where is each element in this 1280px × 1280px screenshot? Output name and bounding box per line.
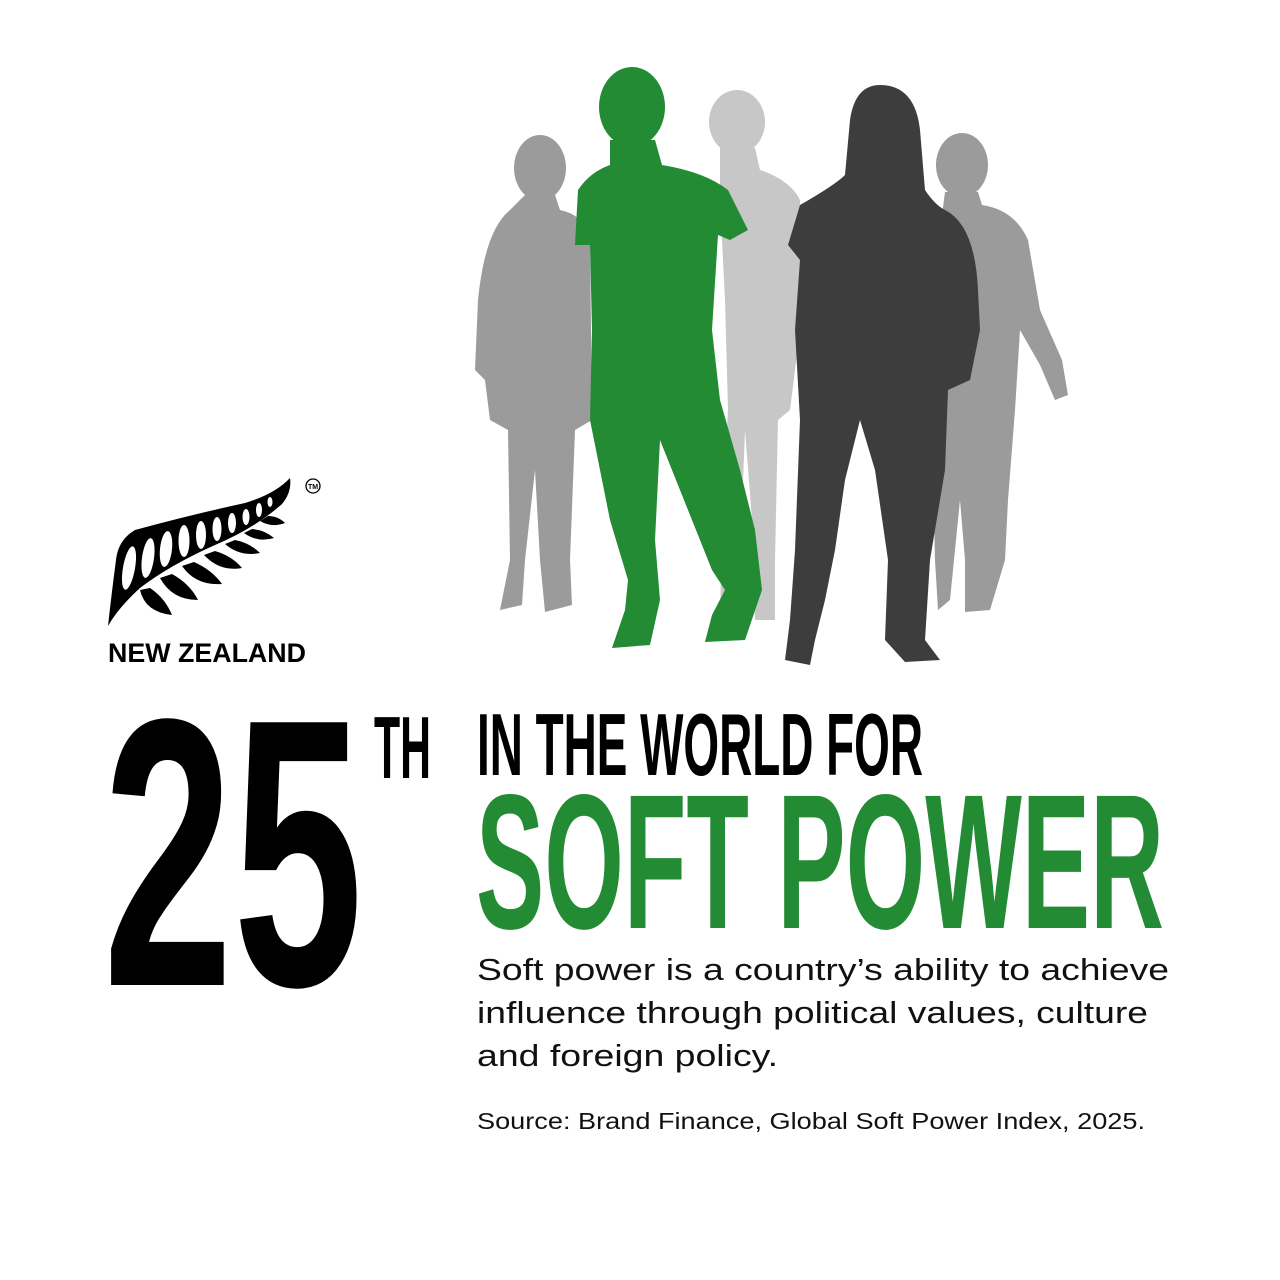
silhouette: dark gray person	[785, 85, 980, 665]
description text	[477, 952, 1169, 1073]
description text: influence through political values, culture	[477, 995, 1148, 1030]
silhouette: green person	[575, 67, 762, 648]
icon: trademark: TM	[308, 484, 318, 491]
description text: Soft power is a country’s ability to achieve	[477, 952, 1169, 987]
silhouettes group	[475, 67, 1068, 665]
logo text: NEW ZEALAND	[108, 638, 306, 668]
big rank number: 25	[103, 639, 363, 1066]
silhouette: light gray center person	[709, 90, 800, 620]
source: Source: Brand Finance, Global Soft Power Index, 2025.	[477, 1108, 1145, 1134]
silhouette: left gray person	[475, 135, 592, 612]
silhouette: right gray person	[932, 133, 1068, 612]
description text: and foreign policy.	[477, 1038, 778, 1073]
icon: fern	[108, 478, 290, 626]
logo: New Zealand fern	[108, 478, 320, 668]
icon: trademark	[306, 479, 320, 493]
text: TH	[374, 698, 431, 797]
